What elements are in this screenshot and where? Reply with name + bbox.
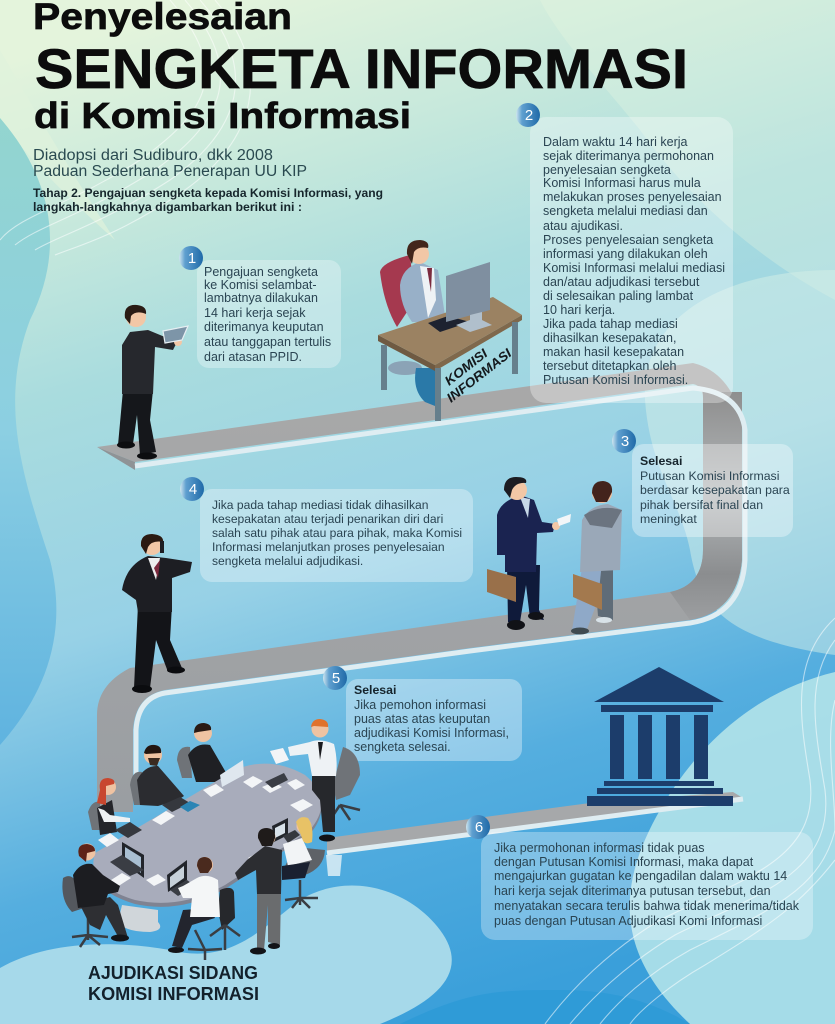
text 3: meningkat bbox=[640, 512, 697, 526]
text 2: atau ajudikasi. bbox=[543, 219, 623, 233]
panel: step 5 bbox=[323, 666, 522, 761]
source text: Diadopsi dari Sudiburo, dkk 2008 bbox=[33, 147, 273, 164]
source text bbox=[33, 147, 307, 180]
bearded man bbox=[137, 766, 184, 806]
panel: step 4 bbox=[180, 477, 473, 582]
right briefcase bbox=[573, 574, 602, 610]
woman with red hair bbox=[97, 800, 117, 835]
text 3: Putusan Komisi Informasi bbox=[640, 469, 779, 483]
badge 3 bbox=[612, 429, 636, 453]
text 2: dan/atau adjudikasi tersebut bbox=[543, 275, 700, 289]
man in white shirt seated bbox=[218, 888, 235, 930]
text 2: Komisi Informasi melalui mediasi bbox=[543, 261, 725, 275]
text 2: penyelesaian sengketa bbox=[543, 163, 671, 177]
icon: court building bbox=[587, 667, 733, 806]
text 2: sejak diterimanya permohonan bbox=[543, 149, 714, 163]
text 2: tersebut ditetapkan oleh bbox=[543, 359, 676, 373]
stage heading bbox=[33, 186, 383, 214]
text box 1 bbox=[197, 260, 341, 368]
papers on table bbox=[98, 776, 313, 887]
text 2: Jika pada tahap mediasi bbox=[543, 317, 678, 331]
text 6: mengajurkan gugatan ke pengadilan dalam waktu 14 bbox=[494, 869, 787, 883]
text 1: diterimanya keuputan bbox=[204, 320, 324, 334]
source text: Paduan Sederhana Penerapan UU KIP bbox=[33, 163, 307, 180]
text 2: informasi yang dilakukan oleh bbox=[543, 247, 708, 261]
monitor bbox=[446, 262, 490, 322]
standing man in front bbox=[257, 890, 281, 950]
title: SENGKETA INFORMASI bbox=[35, 37, 688, 100]
badge 1 bbox=[179, 246, 203, 270]
water glass bbox=[326, 855, 342, 876]
text 5: sengketa selesai. bbox=[354, 740, 451, 754]
panel: step 6 bbox=[466, 815, 813, 940]
panel: step 3 bbox=[612, 429, 793, 537]
figure: officer at desk bbox=[378, 240, 522, 421]
text 1: Pengajuan sengketa bbox=[204, 265, 318, 279]
right man bbox=[592, 558, 613, 620]
standing man in white shirt bbox=[312, 772, 335, 832]
badge 2 bbox=[516, 103, 540, 127]
text 2: makan hasil kesepakatan bbox=[543, 345, 684, 359]
stage heading: langkah-langkahnya digambarkan berikut ini : bbox=[33, 200, 302, 214]
road to court building bbox=[327, 792, 743, 853]
text 2: melakukan proses penyelesaian bbox=[543, 190, 722, 204]
left briefcase bbox=[487, 569, 516, 602]
table pedestal bbox=[118, 905, 160, 932]
text 5: puas atas atas keuputan bbox=[354, 712, 490, 726]
text 4: Jika pada tahap mediasi tidak dihasilkan bbox=[212, 498, 428, 512]
caption: adjudication: AJUDIKASI SIDANG bbox=[88, 963, 258, 983]
badge 4 bbox=[180, 477, 204, 501]
badge 2: 2 bbox=[525, 107, 533, 124]
keyboard bbox=[428, 316, 470, 332]
text box 3 bbox=[632, 444, 793, 537]
text box 2 bbox=[530, 117, 733, 403]
text 1: ke Komisi selambat- bbox=[204, 278, 317, 292]
text 5: Selesai bbox=[354, 683, 396, 697]
text box 6 bbox=[481, 832, 813, 940]
stage heading: Tahap 2. Pengajuan sengketa kepada Komisi Informasi, yang bbox=[33, 186, 383, 200]
text 2: dihasilkan kesepakatan, bbox=[543, 331, 676, 345]
badge 4: 4 bbox=[189, 481, 197, 498]
text 5: Jika pemohon informasi bbox=[354, 698, 486, 712]
desk label: KOMISI bbox=[442, 346, 491, 388]
text 2: Komisi Informasi harus mula bbox=[543, 176, 701, 190]
figure: man on phone bbox=[122, 534, 192, 693]
table bbox=[93, 768, 321, 907]
caption: adjudication bbox=[88, 963, 259, 1004]
illustration: adjudication meeting bbox=[62, 719, 360, 960]
text 3: pihak bersifat final dan bbox=[640, 498, 763, 512]
text 6: hari kerja sejak diterimanya putusan tersebut, dan bbox=[494, 884, 771, 898]
text 4 bbox=[212, 498, 462, 568]
text 2: Proses penyelesaian sengketa bbox=[543, 233, 713, 247]
text 1: dari atasan PPID. bbox=[204, 350, 302, 364]
laptops on table bbox=[110, 760, 300, 896]
blonde woman with chair bbox=[284, 848, 325, 878]
text box 4 bbox=[200, 489, 473, 582]
badge 5: 5 bbox=[332, 670, 340, 687]
text 4: sengketa melalui adjudikasi. bbox=[212, 554, 363, 568]
text box 5 bbox=[346, 679, 522, 761]
text 6: Jika permohonan informasi tidak puas bbox=[494, 841, 705, 855]
title: di Komisi Informasi bbox=[34, 95, 411, 136]
text 6: puas dengan Putusan Adjudikasi Komi Informasi bbox=[494, 914, 762, 928]
badge 6 bbox=[466, 815, 490, 839]
title bbox=[33, 0, 688, 136]
chair bbox=[380, 255, 415, 327]
text 1 bbox=[204, 265, 331, 364]
badge 6: 6 bbox=[475, 819, 483, 836]
figure: man with tablet bbox=[117, 305, 188, 460]
panel: step 2 bbox=[516, 103, 733, 403]
text 1: atau tanggapan tertulis bbox=[204, 335, 331, 349]
text 5 bbox=[354, 683, 509, 754]
text 4: kesepakatan atau terjadi penarikan diri dari bbox=[212, 512, 443, 526]
text 6 bbox=[494, 841, 800, 928]
man in dark jacket seated bbox=[62, 876, 84, 912]
text 3 bbox=[640, 454, 790, 526]
badge 3: 3 bbox=[621, 433, 629, 450]
text 2: 10 hari kerja. bbox=[543, 303, 615, 317]
seated man bbox=[400, 262, 446, 322]
text 1: lambatnya dilakukan bbox=[204, 291, 318, 305]
left man bbox=[507, 565, 544, 622]
chairs behind table bbox=[88, 747, 360, 830]
text 6: dengan Putusan Komisi Informasi, maka dapat bbox=[494, 855, 754, 869]
text 2: Dalam waktu 14 hari kerja bbox=[543, 135, 688, 149]
text 1: 14 hari kerja sejak bbox=[204, 306, 306, 320]
text 6: menyatakan secara terulis bahwa tidak menerima/tidak bbox=[494, 899, 800, 913]
text 5: adjudikasi Komisi Informasi, bbox=[354, 726, 509, 740]
badge 1: 1 bbox=[188, 250, 196, 267]
figure: two men exchanging documents bbox=[487, 477, 622, 634]
text 4: Informasi melanjutkan proses penyelesaian bbox=[212, 540, 445, 554]
text 3: berdasar kesepakatan para bbox=[640, 483, 790, 497]
panel: step 1 bbox=[179, 246, 341, 368]
winding road bbox=[97, 363, 745, 812]
text 2: di selesaikan paling lambat bbox=[543, 289, 694, 303]
text 3: Selesai bbox=[640, 454, 682, 468]
text 2 bbox=[543, 135, 725, 387]
text 2: sengketa melalui mediasi dan bbox=[543, 204, 708, 218]
badge 5 bbox=[323, 666, 347, 690]
man with glasses bbox=[188, 744, 228, 782]
text 2: Putusan Komisi Informasi. bbox=[543, 373, 688, 387]
desk label second line: INFORMASI bbox=[444, 345, 515, 405]
caption: adjudication: KOMISI INFORMASI bbox=[88, 984, 259, 1004]
desk bbox=[378, 335, 435, 371]
text 4: salah satu pihak atau para pihak, maka Komisi bbox=[212, 526, 462, 540]
